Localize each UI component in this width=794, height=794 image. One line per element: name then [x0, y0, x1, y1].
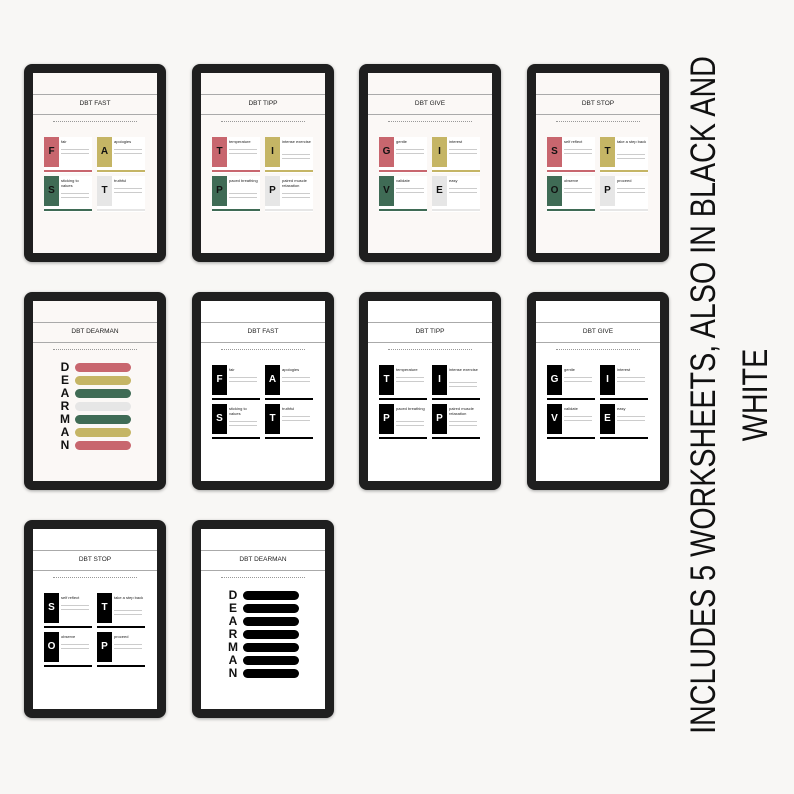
title: DBT STOP — [79, 556, 111, 563]
card F — [212, 365, 260, 401]
dearman list: R — [61, 399, 69, 413]
card T — [265, 404, 313, 440]
tablet: DBT DEARMAN bw — [192, 520, 334, 718]
title: DBT GIVE — [583, 328, 613, 335]
card E: E — [436, 185, 443, 196]
card P: proceed — [114, 634, 128, 639]
card G: G — [551, 374, 558, 385]
card F: F — [48, 146, 55, 157]
card P — [379, 404, 427, 440]
card E — [432, 176, 480, 212]
title: DBT DEARMAN — [239, 556, 287, 563]
tablet: DBT GIVE color — [359, 64, 501, 262]
dearman list: N — [229, 666, 237, 680]
card G — [379, 137, 427, 173]
card F: fair — [229, 367, 235, 372]
card I — [265, 137, 313, 173]
card V: validate — [564, 406, 578, 411]
card P2: P — [436, 413, 443, 424]
card P: P — [604, 185, 611, 196]
card V: validate — [396, 178, 410, 183]
card A — [97, 137, 145, 173]
card V — [379, 176, 427, 212]
dearman list: A — [61, 425, 69, 439]
title: DBT FAST — [248, 328, 278, 335]
card G — [547, 365, 595, 401]
tablet: DBT TIPP bw — [359, 292, 501, 490]
card T: take a step back — [617, 139, 646, 144]
dearman list — [228, 588, 299, 680]
card P2 — [432, 404, 480, 440]
card G: G — [383, 146, 390, 157]
card O: observe — [564, 178, 578, 183]
card T: T — [269, 413, 276, 424]
dearman list: N — [61, 438, 69, 452]
card I: interest — [617, 367, 630, 372]
card I: I — [438, 374, 441, 385]
card P2: paired muscle relaxation — [449, 406, 474, 416]
card E: easy — [617, 406, 625, 411]
card T — [97, 176, 145, 212]
card I: I — [271, 146, 274, 157]
card A: A — [269, 374, 276, 385]
dearman list: D — [61, 360, 69, 374]
tablet: DBT STOP color — [527, 64, 669, 262]
card S: self reflect — [61, 595, 79, 600]
card F: fair — [61, 139, 67, 144]
dearman list: E — [61, 373, 69, 387]
card P — [97, 632, 145, 668]
card S: sticking to values — [229, 406, 247, 416]
card E — [600, 404, 648, 440]
card A: A — [101, 146, 108, 157]
card E: E — [604, 413, 611, 424]
card I — [432, 137, 480, 173]
card I — [600, 365, 648, 401]
card S: S — [48, 602, 55, 613]
card I: intense exercise — [282, 139, 311, 144]
dearman list: R — [229, 627, 237, 641]
dearman list: D — [229, 588, 237, 602]
title: DBT TIPP — [415, 328, 445, 335]
card T: temperature — [229, 139, 251, 144]
card V: V — [383, 185, 390, 196]
card S — [44, 176, 92, 212]
dearman list: A — [229, 653, 237, 667]
card I: I — [606, 374, 609, 385]
card P2 — [265, 176, 313, 212]
title: DBT GIVE — [415, 100, 445, 107]
card I: interest — [449, 139, 462, 144]
card T — [600, 137, 648, 173]
card T: truthful — [282, 406, 294, 411]
title: DBT FAST — [80, 100, 110, 107]
card O — [547, 176, 595, 212]
card S — [547, 137, 595, 173]
card O: O — [48, 641, 55, 652]
card S: S — [216, 413, 223, 424]
card P: P — [216, 185, 223, 196]
tablet: DBT GIVE bw — [527, 292, 669, 490]
card P2: paired muscle relaxation — [282, 178, 307, 188]
card S: S — [48, 185, 55, 196]
card O: O — [551, 185, 558, 196]
dearman list: A — [61, 386, 69, 400]
card T — [379, 365, 427, 401]
tablet: DBT FAST bw — [192, 292, 334, 490]
card T: T — [101, 185, 108, 196]
card P — [600, 176, 648, 212]
card T: take a step back — [114, 595, 143, 600]
card T: T — [383, 374, 390, 385]
dearman list: A — [229, 614, 237, 628]
card T: truthful — [114, 178, 126, 183]
card F: F — [216, 374, 223, 385]
card S — [44, 593, 92, 629]
card S: S — [551, 146, 558, 157]
card T: temperature — [396, 367, 418, 372]
dearman list: M — [60, 412, 70, 426]
dearman list: M — [228, 640, 238, 654]
vertical caption — [684, 56, 775, 734]
card A: apologies — [114, 139, 131, 144]
title: DBT DEARMAN — [71, 328, 119, 335]
tablet: DBT TIPP color — [192, 64, 334, 262]
card T: T — [101, 602, 108, 613]
card A: apologies — [282, 367, 299, 372]
card V: V — [551, 413, 558, 424]
card O: observe — [61, 634, 75, 639]
card G: gentle — [396, 139, 407, 144]
card I: intense exercise — [449, 367, 478, 372]
title: DBT STOP — [582, 100, 614, 107]
card S: sticking to values — [61, 178, 79, 188]
tablet: DBT FAST color — [24, 64, 166, 262]
card T — [212, 137, 260, 173]
tablet: DBT DEARMAN color — [24, 292, 166, 490]
card I: I — [438, 146, 441, 157]
vertical caption: INCLUDES 5 WORKSHEETS, ALSO IN BLACK AND — [684, 56, 723, 734]
card T — [97, 593, 145, 629]
card P2: P — [269, 185, 276, 196]
vertical caption: WHITE — [736, 349, 775, 441]
card P: P — [383, 413, 390, 424]
card F — [44, 137, 92, 173]
card T: T — [604, 146, 611, 157]
card P — [212, 176, 260, 212]
card E: easy — [449, 178, 457, 183]
card P: paced breathing — [396, 406, 425, 411]
card S: self reflect — [564, 139, 582, 144]
card S — [212, 404, 260, 440]
tablet: DBT STOP bw — [24, 520, 166, 718]
card P: P — [101, 641, 108, 652]
card A — [265, 365, 313, 401]
dearman list — [60, 360, 131, 452]
card V — [547, 404, 595, 440]
card G: gentle — [564, 367, 575, 372]
title: DBT TIPP — [248, 100, 278, 107]
card P: proceed — [617, 178, 631, 183]
card I — [432, 365, 480, 401]
card O — [44, 632, 92, 668]
dearman list: E — [229, 601, 237, 615]
card P: paced breathing — [229, 178, 258, 183]
card T: T — [216, 146, 223, 157]
